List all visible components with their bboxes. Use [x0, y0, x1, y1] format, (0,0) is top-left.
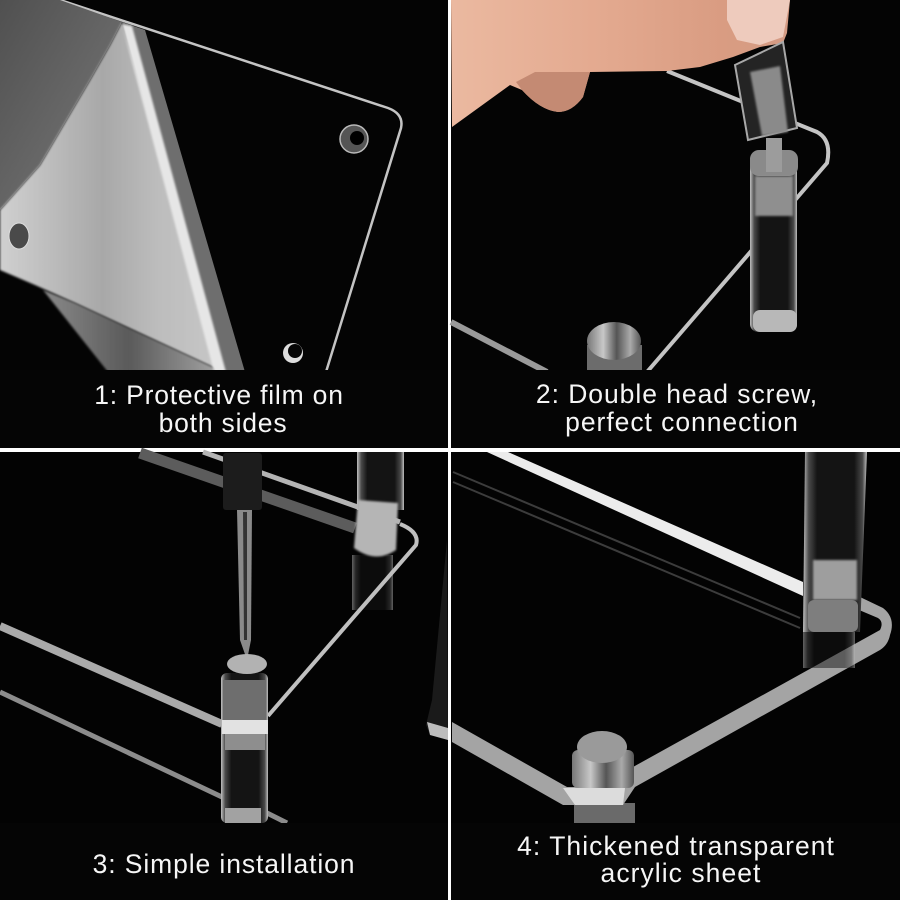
fingernail [727, 0, 790, 45]
panel: simple installation [0, 452, 448, 900]
lower shelf edge [0, 692, 287, 823]
screw thread [766, 138, 782, 172]
icon: mounting holes [9, 125, 368, 363]
caption 1: 1: Protective film on [94, 380, 344, 410]
front screw [572, 731, 634, 788]
far leg [426, 540, 448, 740]
lower standoff rod [750, 150, 798, 332]
thick acrylic edge [452, 597, 892, 805]
caption band 2 [451, 370, 900, 448]
caption 1: both sides [159, 408, 287, 438]
dark film area [0, 0, 122, 210]
film edge strip [122, 22, 245, 372]
back bright edge [487, 452, 803, 596]
finger shadow [516, 72, 590, 112]
caption 4: acrylic sheet [601, 858, 761, 888]
front corner highlight [563, 788, 625, 805]
panel: protective film [0, 0, 448, 448]
acrylic sheet edges [451, 322, 547, 372]
caption band 3 [0, 823, 448, 900]
far leg cap [427, 722, 448, 740]
caption 2: perfect connection [565, 407, 799, 437]
back shelf edges [140, 452, 400, 528]
reflection lines [453, 472, 800, 628]
front shelf edges [0, 626, 222, 724]
screw head [587, 322, 642, 372]
panel: thickened acrylic [451, 452, 900, 900]
front rod lower section [574, 803, 635, 823]
front standoff rod [221, 673, 268, 823]
caption 3: 3: Simple installation [93, 849, 355, 879]
back rod reflection [803, 632, 855, 668]
panel: double head screw [451, 0, 900, 448]
hand and finger [451, 0, 790, 127]
bright peeled film [0, 22, 228, 372]
caption band 1 [0, 370, 448, 448]
upper standoff [735, 42, 797, 140]
back standoff rod [803, 452, 867, 632]
acrylic sheet outline [60, 0, 401, 372]
caption 2: 2: Double head screw, [536, 379, 818, 409]
caption 4: 4: Thickened transparent [517, 831, 835, 861]
screwdriver [223, 453, 267, 674]
caption band 4 [451, 823, 900, 900]
back rod reflection [352, 555, 393, 610]
back standoff rod [354, 452, 404, 557]
lower film fold [43, 290, 215, 372]
